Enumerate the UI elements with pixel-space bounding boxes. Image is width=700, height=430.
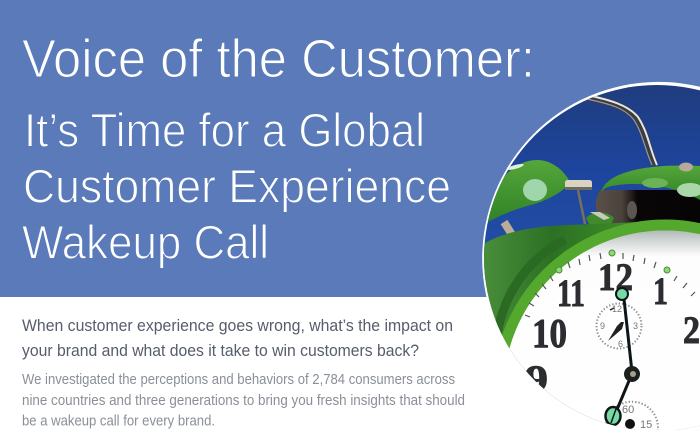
blue banner <box>0 0 700 297</box>
title: It’s Time for a Global <box>24 104 425 156</box>
title: Wakeup Call <box>22 216 269 268</box>
clock body <box>480 222 640 430</box>
hour numerals <box>526 264 699 389</box>
hour numerals: 1 <box>653 270 668 313</box>
small seconds dial: 9 <box>600 321 605 331</box>
handle <box>587 95 657 165</box>
sky background <box>480 80 700 280</box>
lead question: When customer experience goes wrong, what’s the impact on <box>22 316 453 335</box>
hour numerals: 10 <box>532 310 567 356</box>
small seconds dial: 6 <box>618 339 623 349</box>
right bell <box>586 162 700 224</box>
intro paragraph <box>22 371 465 430</box>
intro paragraph: We investigated the perceptions and behaviors of 2,784 consumers across <box>22 371 455 388</box>
lower small dial <box>606 402 658 430</box>
title <box>22 29 535 268</box>
hour numerals: 9 <box>525 358 548 401</box>
title: Voice of the Customer: <box>22 29 535 89</box>
green rim <box>492 220 700 430</box>
minute ticks <box>525 253 695 317</box>
lead question <box>22 316 453 360</box>
lower small dial: 60 <box>622 404 634 416</box>
green lume dots <box>556 250 670 273</box>
title: Customer Experience <box>23 160 451 212</box>
small seconds dial: 12 <box>612 304 622 314</box>
clock hands <box>606 288 640 425</box>
hammer post <box>500 180 592 234</box>
small seconds dial <box>596 304 642 349</box>
left bell <box>484 160 570 224</box>
alarm clock photo <box>480 80 700 430</box>
intro paragraph: nine countries and three generations to bring you fresh insights that should <box>22 392 465 409</box>
intro paragraph: be a wakeup call for every brand. <box>22 412 215 430</box>
lead question: your brand and what does it take to win customers back? <box>22 341 419 360</box>
hour numerals: 12 <box>598 256 633 299</box>
hour numerals: 11 <box>557 272 585 315</box>
dial <box>503 230 700 430</box>
white ring around clock photo <box>482 82 700 430</box>
small seconds dial: 3 <box>633 321 638 331</box>
